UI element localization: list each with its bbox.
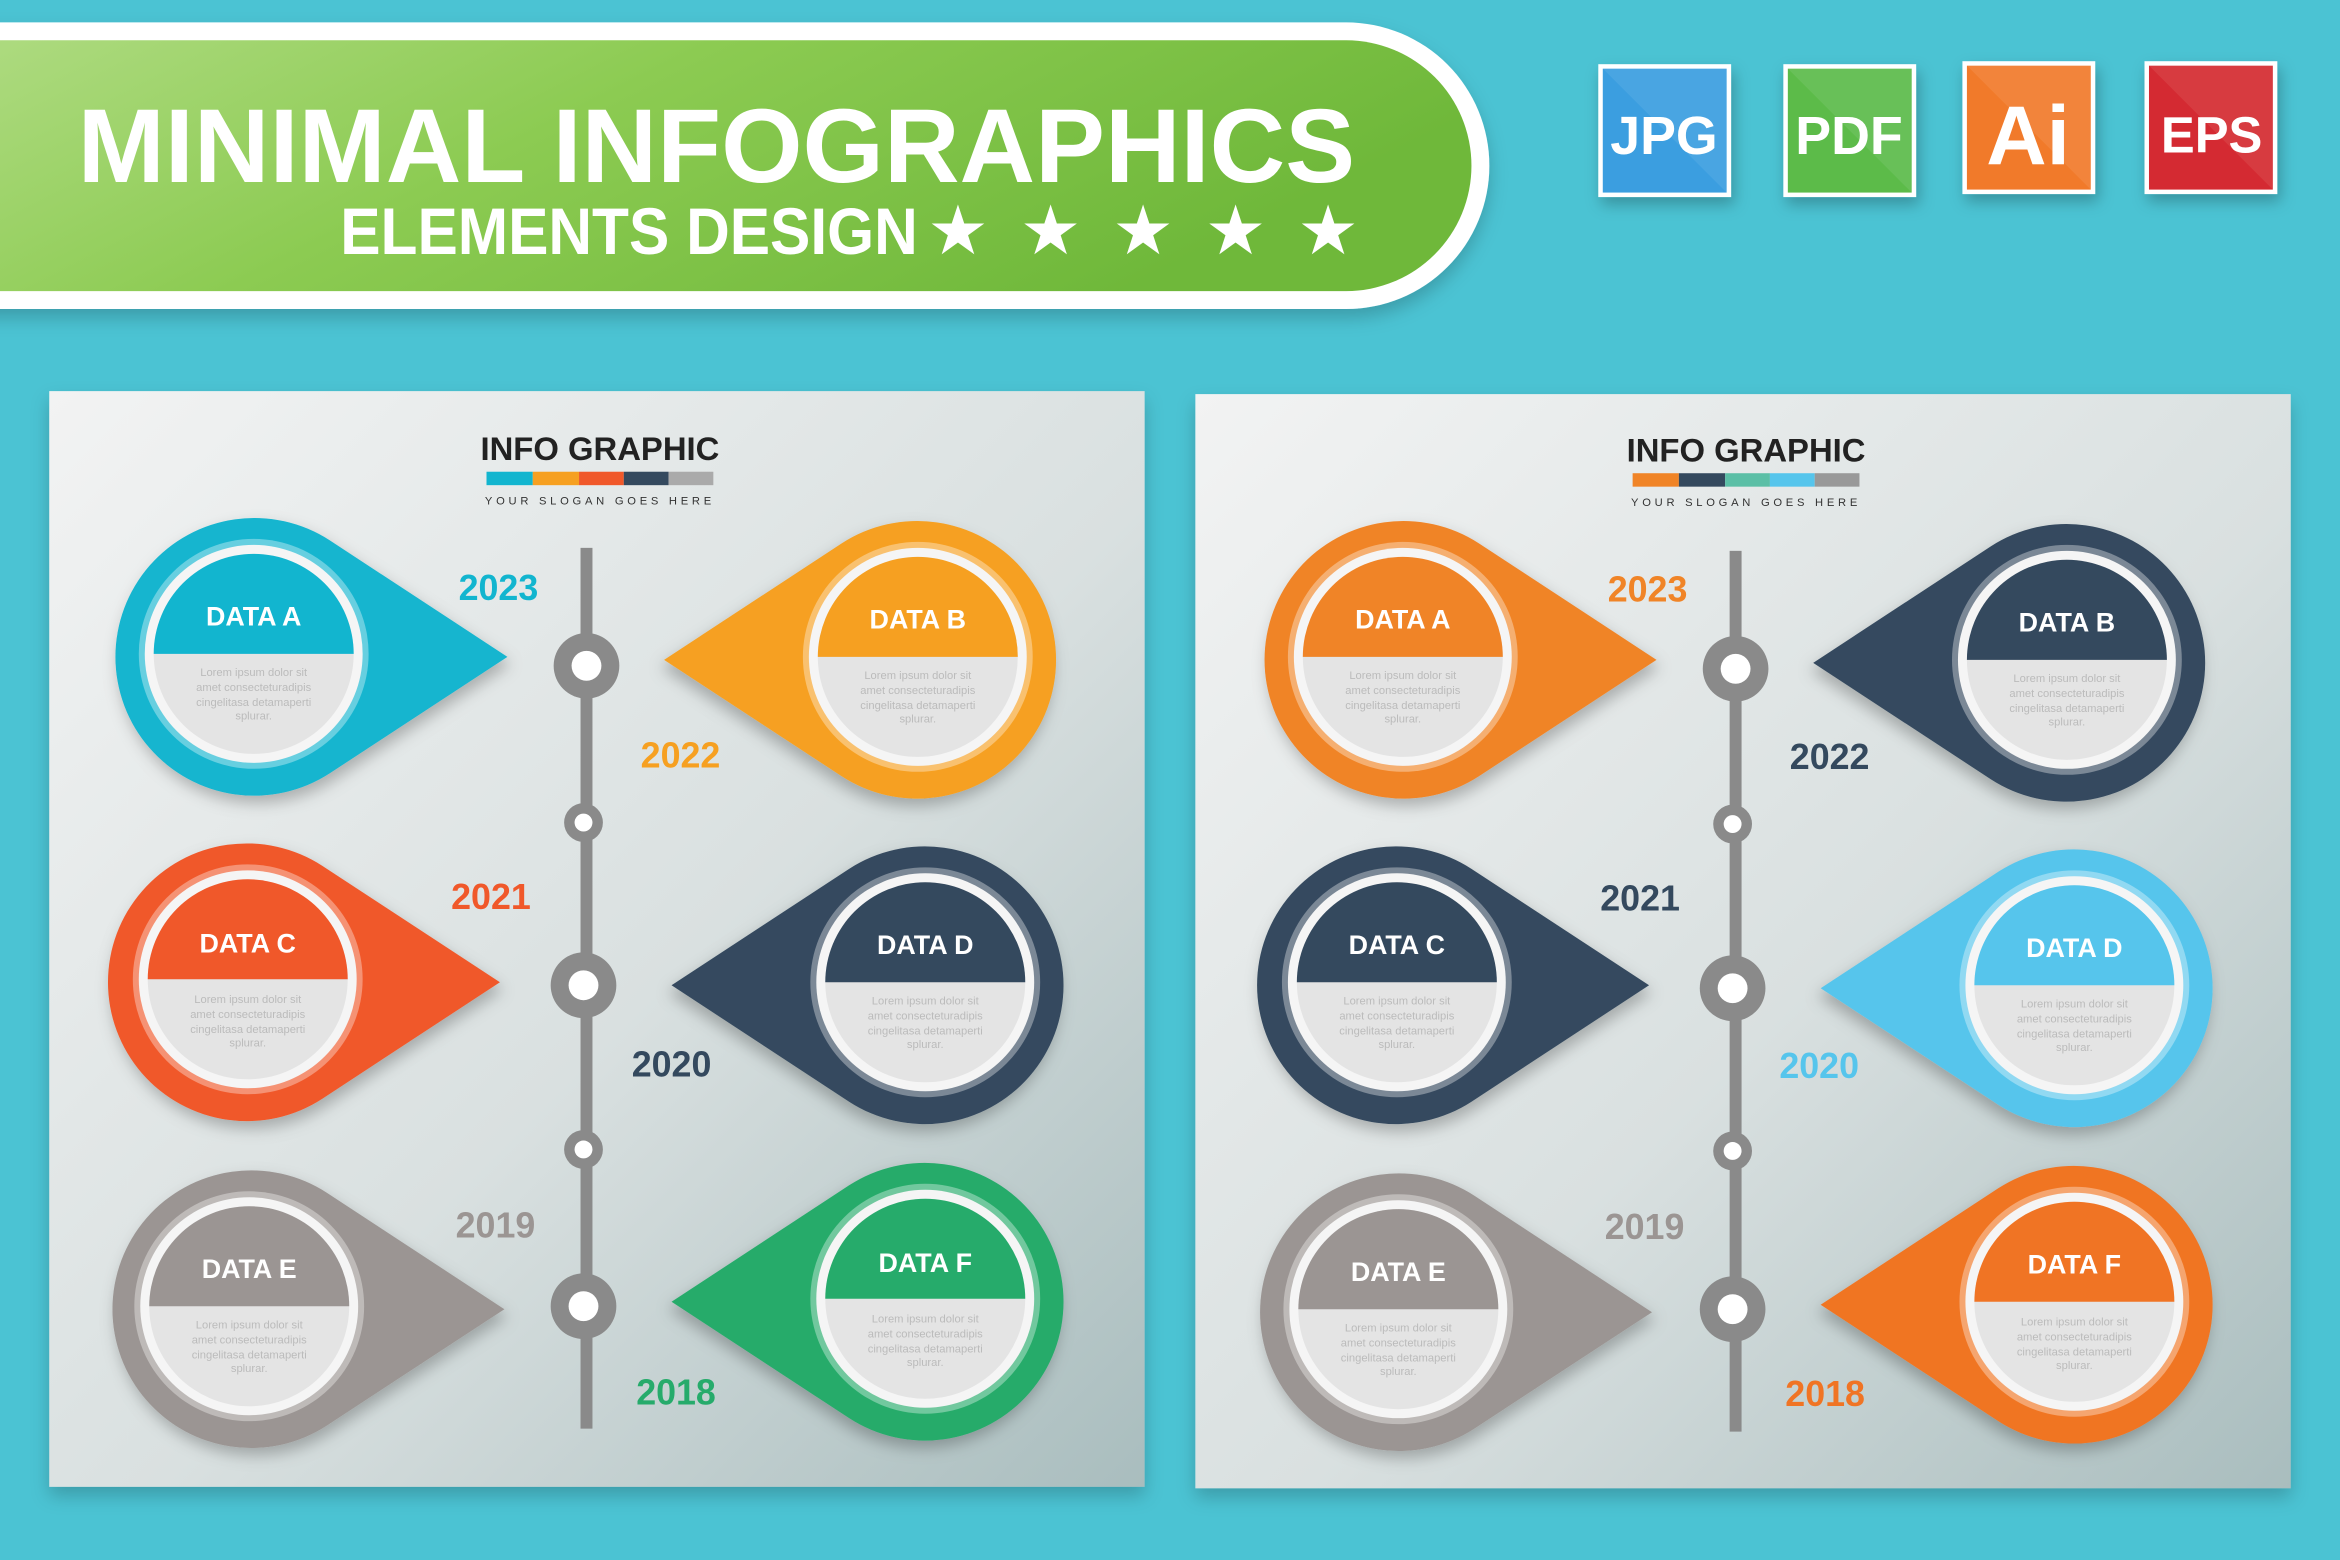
- drop: DATA E: DATA E: [1351, 1257, 1446, 1287]
- stars: ★: [1205, 192, 1266, 269]
- drop: DATA D: [672, 846, 1064, 1124]
- icon: PDF: [1783, 64, 1916, 197]
- drop: DATA E: amet consecteturadipis: [192, 1335, 307, 1347]
- drop: DATA B: DATA B: [2019, 607, 2115, 637]
- heading: INFO GRAPHIC: [1627, 431, 1865, 468]
- years: [1600, 570, 1869, 1414]
- stars: ★: [1020, 192, 1081, 269]
- heading: YOUR SLOGAN GOES HERE: [1631, 497, 1861, 509]
- icon: Ai: [1962, 61, 2095, 194]
- years: 2023: [459, 568, 538, 608]
- icon: EPS: EPS: [2161, 106, 2262, 163]
- drop: DATA C: amet consecteturadipis: [190, 1009, 306, 1021]
- years: 2020: [632, 1044, 711, 1084]
- drop: DATA C: Lorem ipsum dolor sit: [1343, 996, 1451, 1008]
- drop: DATA F: Lorem ipsum dolor sit: [872, 1314, 980, 1326]
- drop: DATA D: [1821, 849, 2213, 1127]
- years: 2018: [636, 1373, 716, 1413]
- drop: DATA D: cingelitasa detamaperti: [2017, 1029, 2132, 1041]
- drop: DATA E: Lorem ipsum dolor sit: [196, 1320, 304, 1332]
- drop: DATA E: [112, 1170, 504, 1448]
- drop: DATA A: [1265, 521, 1657, 799]
- drop: DATA A: splurar.: [1384, 714, 1421, 726]
- title: MINIMAL INFOGRAPHICS: [78, 88, 1355, 205]
- drop: DATA C: DATA C: [199, 928, 296, 958]
- years: 2021: [451, 877, 531, 917]
- drop: DATA D: splurar.: [907, 1039, 944, 1051]
- drop: DATA C: amet consecteturadipis: [1339, 1011, 1455, 1023]
- drop: DATA C: [108, 843, 500, 1121]
- drop: DATA E: amet consecteturadipis: [1341, 1338, 1456, 1350]
- drop: DATA A: splurar.: [235, 711, 272, 723]
- drop: DATA F: Lorem ipsum dolor sit: [2021, 1317, 2129, 1329]
- drop: DATA A: DATA A: [206, 601, 301, 631]
- drop: DATA D: DATA D: [2026, 933, 2123, 963]
- drop: DATA A: amet consecteturadipis: [196, 682, 312, 694]
- drop: DATA F: splurar.: [2056, 1360, 2093, 1372]
- drop: DATA F: [1821, 1166, 2213, 1444]
- years: 2019: [456, 1206, 535, 1246]
- years: [451, 568, 720, 1413]
- drop: DATA F: amet consecteturadipis: [2017, 1332, 2132, 1344]
- drop: DATA F: DATA F: [879, 1248, 972, 1278]
- heading: [1627, 431, 1865, 509]
- drop: DATA D: amet consecteturadipis: [868, 1011, 983, 1023]
- panel: left timeline: [49, 391, 1145, 1487]
- stars: [927, 192, 1359, 269]
- years: 2021: [1600, 879, 1680, 919]
- drop: DATA C: cingelitasa detamaperti: [190, 1024, 305, 1036]
- drop: DATA D: Lorem ipsum dolor sit: [872, 996, 980, 1008]
- drop: DATA F: DATA F: [2028, 1249, 2121, 1279]
- drop: DATA E: cingelitasa detamaperti: [1341, 1352, 1456, 1364]
- drop: DATA B: Lorem ipsum dolor sit: [2013, 673, 2121, 685]
- drop: DATA A: Lorem ipsum dolor sit: [1349, 670, 1457, 682]
- drop: DATA E: Lorem ipsum dolor sit: [1345, 1323, 1453, 1335]
- years: 2022: [1790, 737, 1869, 777]
- heading: YOUR SLOGAN GOES HERE: [485, 496, 715, 508]
- drop: DATA F: cingelitasa detamaperti: [868, 1343, 983, 1355]
- drop: DATA A: DATA A: [1355, 604, 1451, 634]
- drop: DATA D: cingelitasa detamaperti: [868, 1026, 983, 1038]
- icon: EPS: [2145, 61, 2277, 194]
- drop: DATA B: Lorem ipsum dolor sit: [864, 670, 972, 682]
- drop: DATA B: [1813, 524, 2205, 802]
- drop: DATA F: splurar.: [907, 1357, 944, 1369]
- drop: DATA A: [115, 518, 507, 796]
- timeline line: [551, 548, 619, 1429]
- banner: [0, 22, 1489, 309]
- drop: DATA A: cingelitasa detamaperti: [1345, 700, 1460, 712]
- drop: DATA B: cingelitasa detamaperti: [860, 700, 975, 712]
- drop: DATA A: amet consecteturadipis: [1345, 685, 1461, 697]
- drop: DATA A: cingelitasa detamaperti: [196, 697, 311, 709]
- icon: Ai: Ai: [1986, 88, 2070, 182]
- drop: DATA C: splurar.: [229, 1037, 266, 1049]
- heading: [480, 430, 719, 508]
- drop: DATA B: cingelitasa detamaperti: [2009, 703, 2124, 715]
- drop: DATA C: [1257, 846, 1649, 1124]
- years: 2020: [1779, 1046, 1859, 1086]
- years: 2018: [1785, 1374, 1865, 1414]
- drop: DATA B: DATA B: [870, 604, 966, 634]
- icon: JPG: JPG: [1610, 106, 1718, 166]
- drop: DATA B: amet consecteturadipis: [860, 685, 976, 697]
- drop: DATA D: amet consecteturadipis: [2017, 1014, 2132, 1026]
- stars: ★: [1297, 192, 1359, 269]
- drop: DATA F: [672, 1163, 1064, 1441]
- panel: right timeline: [1195, 394, 2291, 1488]
- drop: DATA C: Lorem ipsum dolor sit: [194, 994, 302, 1006]
- drop: DATA D: DATA D: [877, 930, 973, 960]
- icon: PDF: PDF: [1795, 106, 1903, 166]
- icon: JPG: [1598, 64, 1731, 197]
- drop: DATA C: splurar.: [1378, 1039, 1415, 1051]
- drop: DATA B: [664, 521, 1056, 799]
- years: 2019: [1605, 1207, 1684, 1247]
- stars: ★: [1112, 192, 1174, 269]
- drop: DATA B: amet consecteturadipis: [2009, 688, 2125, 700]
- years: 2022: [641, 735, 720, 775]
- drop: DATA D: Lorem ipsum dolor sit: [2021, 999, 2129, 1011]
- drop: DATA D: splurar.: [2056, 1042, 2093, 1054]
- heading: INFO GRAPHIC: [480, 430, 719, 467]
- drop: DATA E: [1260, 1173, 1652, 1451]
- drop: DATA C: cingelitasa detamaperti: [1339, 1026, 1454, 1038]
- subtitle: ELEMENTS DESIGN: [340, 195, 918, 268]
- drop: DATA B: splurar.: [2049, 717, 2085, 729]
- timeline line: [1700, 551, 1768, 1432]
- drop: DATA B: splurar.: [899, 714, 936, 726]
- drop: DATA E: cingelitasa detamaperti: [192, 1349, 307, 1361]
- drop: DATA E: splurar.: [231, 1363, 268, 1375]
- drop: DATA E: DATA E: [202, 1254, 297, 1284]
- years: 2023: [1608, 570, 1687, 610]
- stars: ★: [927, 192, 989, 269]
- drop: DATA E: splurar.: [1380, 1366, 1417, 1378]
- drop: DATA F: amet consecteturadipis: [868, 1329, 983, 1341]
- drop: DATA C: DATA C: [1349, 930, 1445, 960]
- drop: DATA F: cingelitasa detamaperti: [2017, 1346, 2132, 1358]
- drop: DATA A: Lorem ipsum dolor sit: [200, 667, 308, 679]
